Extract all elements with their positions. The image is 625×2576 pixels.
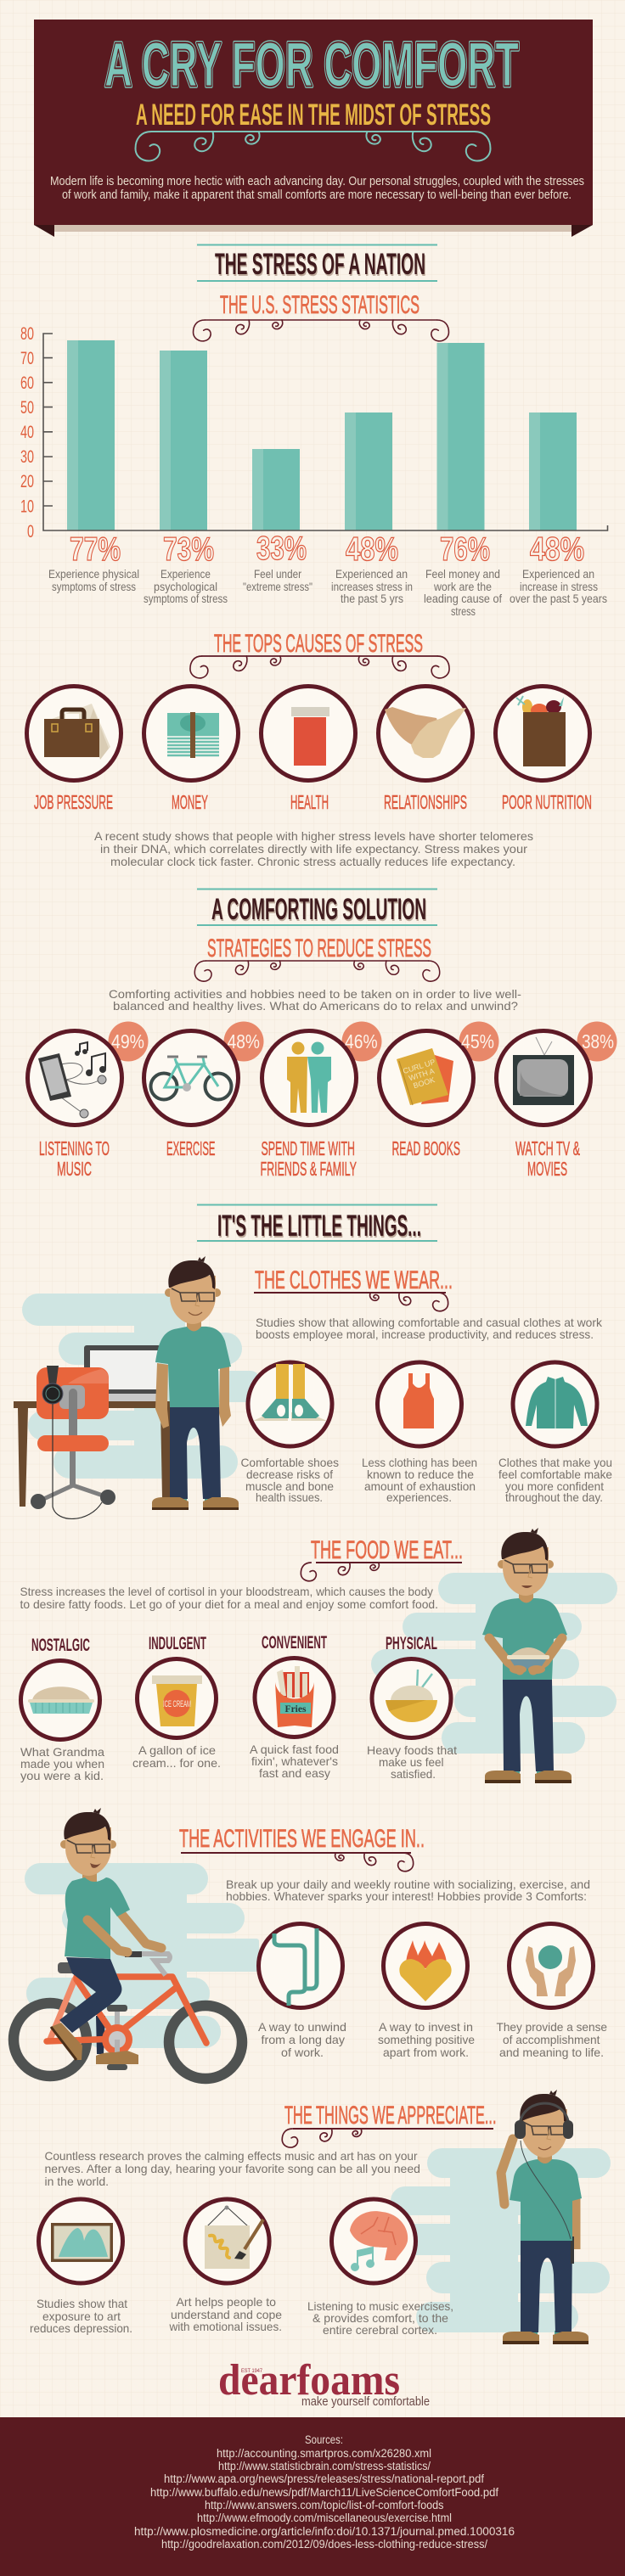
bar descriptions: the past 5 yrs — [341, 592, 403, 605]
food labels: PHYSICAL — [386, 1634, 437, 1653]
y axis labels: 30 — [20, 447, 34, 467]
sources list: http://www.statisticbrain.com/stress-statistics/ — [218, 2460, 431, 2472]
axes — [43, 334, 608, 530]
captions: appreciation: reduces depression. — [30, 2321, 132, 2335]
text: clothes intro: Studies show that allowing comfortable and casual clothes at work — [256, 1316, 603, 1329]
frame — [47, 1977, 206, 2043]
shoe — [51, 2023, 82, 2060]
captions: clothes: decrease risks of — [246, 1468, 333, 1481]
subheading: strategies to reduce stress: STRATEGIES TO REDUCE STRESS — [207, 934, 431, 962]
captions: clothes — [241, 1456, 612, 1504]
logo: dearfoams: make yourself comfortable — [301, 2395, 430, 2409]
icon: job pressure — [27, 686, 121, 781]
percentage labels: 48% — [530, 531, 584, 568]
strategy labels: MOVIES — [527, 1158, 567, 1180]
y axis labels — [20, 324, 34, 542]
strategy labels: EXERCISE — [166, 1137, 216, 1159]
icon: read books: CURL UP — [402, 1058, 436, 1075]
bar descriptions: increases stress in — [331, 580, 413, 593]
subheading: clothes we wear: THE CLOTHES WE WEAR... — [255, 1266, 453, 1294]
headphones on chair — [42, 1366, 102, 1518]
sources list: http://accounting.smartpros.com/x26280.xml — [217, 2447, 431, 2460]
captions: clothes: amount of exhaustion — [364, 1479, 476, 1493]
percentage labels: 33% — [256, 530, 307, 567]
bubble percentages: 45% — [461, 1030, 494, 1052]
icon: ice cream — [138, 1658, 216, 1738]
desk — [14, 1401, 170, 1507]
strategy labels: SPEND TIME WITH — [262, 1137, 355, 1159]
icon: exercise — [144, 1030, 238, 1125]
subheading: food we eat: THE FOOD WE EAT... — [311, 1536, 463, 1564]
text: telomere study: molecular clock tick faster. Chronic stress actually reduces life expectancy. — [110, 855, 515, 868]
bar descriptions: Experienced an — [335, 567, 408, 581]
y axis labels: 10 — [20, 497, 34, 516]
sources list: http://goodrelaxation.com/2012/09/does-less-clothing-reduce-stress/ — [161, 2538, 487, 2551]
captions: food — [20, 1743, 457, 1782]
subheading: activities we engage in — [179, 1825, 425, 1872]
logo: dearfoams: EST 1947 — [241, 2368, 262, 2374]
captions: activities — [258, 2020, 607, 2059]
heading: it's the little things: IT'S THE LITTLE THINGS... — [217, 1209, 421, 1243]
subheading: u.s. stress statistics: THE U.S. STRESS STATISTICS — [220, 291, 419, 319]
captions: clothes: muscle and bone — [245, 1479, 334, 1493]
bar descriptions: Feel under — [254, 567, 301, 581]
cause labels: HEALTH — [290, 791, 329, 813]
captions: appreciation: entire cerebral cortex. — [323, 2323, 437, 2337]
captions: activities: A way to unwind — [258, 2020, 346, 2034]
bar descriptions: symptoms of stress — [144, 592, 228, 605]
banner — [34, 20, 593, 237]
text: telomere study: A recent study shows that people with higher stress levels have shorter telomeres — [94, 829, 533, 843]
text: telomere study: in their DNA, which correlates directly with life expectancy. Stress makes your — [100, 842, 527, 856]
captions: clothes: throughout the day. — [505, 1490, 603, 1504]
icon: read books: WITH A — [408, 1067, 436, 1082]
icon: tank top — [377, 1362, 462, 1446]
captions: appreciation: Listening to music exercises, — [307, 2299, 453, 2313]
panel: sources footer — [0, 2417, 625, 2576]
bar descriptions: leading cause of — [424, 592, 502, 605]
bar descriptions: Experienced an — [522, 567, 594, 581]
crank — [102, 2005, 132, 2070]
icon: passion heart — [384, 1923, 467, 2008]
text: comforting activities: Comforting activities and hobbies need to be taken on in order to live well- — [109, 987, 521, 1001]
captions: activities: A way to invest in — [379, 2020, 473, 2034]
captions: food: satisfied. — [391, 1767, 436, 1781]
sources list: http://www.plosmedicine.org/article/info:doi/10.1371/journal.pmed.1000316 — [134, 2525, 515, 2538]
percentage labels — [70, 530, 584, 568]
person: food — [482, 1528, 572, 1783]
captions: activities: something positive — [378, 2033, 475, 2046]
subheading: clothes we wear — [254, 1266, 453, 1311]
text: activities intro: hobbies. Whatever sparks your interest! Hobbies provide 3 Comforts: — [226, 1889, 587, 1903]
bubble percentages — [111, 1030, 614, 1052]
captions: appreciation — [30, 2295, 453, 2337]
bar chart — [20, 324, 608, 618]
panel: activities clouds — [25, 1863, 259, 2048]
y axis labels: 60 — [20, 373, 34, 393]
arms and pie in hands — [489, 1638, 562, 1674]
text: food intro: Stress increases the level of cortisol in your bloodstream, which causes the body — [20, 1585, 433, 1598]
cause labels: RELATIONSHIPS — [384, 791, 467, 813]
bar descriptions: Experience — [160, 567, 211, 581]
text: appreciation intro — [44, 2149, 420, 2188]
captions: food: fast and easy — [259, 1766, 330, 1780]
icon: brain and music — [331, 2199, 416, 2283]
captions: food: make us feel — [379, 1755, 443, 1769]
captions: food: A quick fast food — [250, 1743, 339, 1756]
cause labels: MONEY — [172, 791, 208, 813]
panel: strategies — [27, 1022, 617, 1180]
subheading: top causes of stress: THE TOPS CAUSES OF STRESS — [214, 630, 423, 658]
wheels — [14, 2003, 242, 2079]
text: clothes intro: boosts employee moral, increase productivity, and reduces stress. — [256, 1327, 594, 1341]
captions: food: A gallon of ice — [138, 1743, 216, 1757]
y axis labels: 70 — [20, 349, 34, 368]
icon: friends and family — [262, 1030, 357, 1125]
bar descriptions: stress — [451, 604, 476, 618]
torso — [82, 1867, 97, 1883]
food labels — [31, 1633, 437, 1655]
strategy labels: READ BOOKS — [392, 1137, 460, 1159]
cause labels: JOB PRESSURE — [34, 791, 113, 813]
subheading: u.s. stress statistics — [194, 291, 448, 341]
icon: read books: BOOK — [412, 1075, 436, 1090]
y axis labels: 80 — [20, 324, 34, 344]
heading: the stress of a nation: THE STRESS OF A NATION — [215, 248, 425, 281]
y axis labels: 40 — [20, 423, 34, 442]
bubble percentages: 48% — [228, 1030, 260, 1052]
strategy labels — [39, 1137, 580, 1180]
icon: fries — [255, 1658, 334, 1737]
text: clothes intro — [256, 1316, 603, 1341]
bar descriptions: over the past 5 years — [510, 592, 607, 605]
headphones — [515, 2103, 573, 2239]
food labels: CONVENIENT — [262, 1633, 327, 1653]
laptop — [84, 1345, 160, 1401]
captions: clothes: Comfortable shoes — [241, 1456, 339, 1469]
icon: hands and globe — [510, 1923, 593, 2008]
icon: fries: Fries — [285, 1704, 307, 1715]
bar descriptions: increase in stress — [520, 580, 598, 593]
icon: framed art — [39, 2199, 122, 2283]
captions: food: made you when — [20, 1757, 104, 1771]
text: telomere study — [94, 829, 533, 868]
intro text — [50, 174, 584, 202]
logo: dearfoams: dearfoams — [218, 2356, 400, 2405]
y axis labels: 20 — [20, 472, 34, 491]
captions: appreciation: Studies show that — [37, 2297, 127, 2310]
captions: clothes: Less clothing has been — [362, 1456, 477, 1469]
panel: food clouds — [371, 1573, 617, 1754]
icon: read books — [379, 1030, 474, 1125]
icon: unwind — [258, 1923, 343, 2008]
sources list — [134, 2433, 515, 2551]
percentage bubbles — [109, 1022, 617, 1061]
bar descriptions — [48, 567, 607, 618]
captions: clothes: health issues. — [256, 1490, 323, 1504]
captions: food: cream... for one. — [132, 1756, 221, 1770]
bar descriptions: psychological — [154, 580, 217, 593]
far leg — [96, 2016, 105, 2054]
panel: causes of stress — [27, 686, 592, 813]
icon: jacket — [513, 1362, 597, 1446]
text: appreciation intro: in the world. — [44, 2175, 109, 2188]
captions: food: What Grandma — [20, 1745, 104, 1759]
icon: pie — [20, 1660, 100, 1740]
panel: clothes clouds — [22, 1294, 259, 1479]
subheading: top causes of stress — [190, 630, 449, 678]
icon: money — [144, 686, 238, 781]
captions: clothes: you more confident — [505, 1479, 604, 1493]
captions: clothes: Clothes that make you — [498, 1456, 612, 1469]
text: comforting activities: balanced and healthy lives. What do Americans do to relax and unwind? — [113, 999, 518, 1013]
bar descriptions: symptoms of stress — [52, 580, 136, 593]
icon: listening to music — [27, 1030, 122, 1125]
handlebar — [136, 1954, 170, 1975]
strategy labels: FRIENDS & FAMILY — [260, 1158, 357, 1180]
icon: watch tv and movies — [496, 1030, 591, 1125]
text: food intro: to desire fatty foods. Let go of your diet for a meal and enjoy some comfort food. — [20, 1597, 438, 1611]
strategy labels: MUSIC — [57, 1158, 92, 1180]
captions: activities: They provide a sense — [496, 2020, 607, 2034]
captions: activities: of work. — [281, 2046, 324, 2059]
captions: clothes: experiences. — [386, 1490, 452, 1504]
sources list: http://www.answers.com/topic/list-of-comfort-foods — [205, 2499, 444, 2511]
captions: food: Heavy foods that — [367, 1743, 457, 1757]
captions: activities: and meaning to life. — [499, 2046, 604, 2059]
captions: appreciation: understand and cope — [171, 2308, 282, 2321]
icon: painting — [185, 2199, 269, 2283]
sources list: http://www.buffalo.edu/news/pdf/March11/LiveScienceComfortFood.pdf — [150, 2486, 498, 2499]
percentage labels: 77% — [70, 531, 121, 568]
sources list: http://www.apa.org/news/press/releases/stress/national-report.pdf — [164, 2472, 484, 2485]
icon: relationships — [379, 686, 472, 781]
captions: activities: apart from work. — [383, 2046, 469, 2059]
cause labels — [34, 791, 592, 813]
leg — [59, 1957, 121, 2033]
captions: food: fixin', whatever's — [251, 1754, 338, 1768]
panel: appreciation clouds — [391, 2148, 611, 2332]
strategy labels: LISTENING TO — [39, 1137, 110, 1159]
desk with laptop and chair — [14, 1345, 170, 1518]
bubble percentages: 49% — [111, 1030, 144, 1052]
captions: activities: of accomplishment — [503, 2033, 600, 2046]
icon: bowl of rice — [372, 1658, 451, 1738]
sources list: http://www.efmoody.com/miscellaneous/exercise.html — [197, 2511, 452, 2524]
saddle — [58, 1962, 75, 1973]
icon: comfortable shoes — [248, 1362, 332, 1446]
bar descriptions: Feel money and — [425, 567, 500, 581]
captions: appreciation: & provides comfort, to the — [312, 2311, 448, 2325]
percentage labels: 73% — [163, 531, 214, 568]
sources list: Sources: — [305, 2433, 343, 2446]
bubble percentages: 38% — [582, 1030, 614, 1052]
bar descriptions: Experience physical — [48, 567, 139, 581]
text: food intro — [20, 1585, 438, 1611]
food labels: INDULGENT — [149, 1634, 206, 1653]
y axis labels: 50 — [20, 398, 34, 418]
bars — [67, 340, 577, 530]
percentage labels: 48% — [346, 531, 398, 568]
captions: food: you were a kid. — [20, 1769, 104, 1782]
subheading: activities we engage in: THE ACTIVITIES WE ENGAGE IN.. — [179, 1825, 425, 1853]
text: appreciation intro: Countless research proves the calming effects music and art has on your — [44, 2149, 418, 2163]
person: clothes — [152, 1256, 239, 1510]
captions: activities: from a long day — [262, 2033, 345, 2046]
percentage labels: 76% — [440, 531, 490, 568]
y axis labels: 0 — [27, 522, 34, 542]
text: activities intro — [226, 1877, 590, 1903]
subheading: things we appreciate — [282, 2102, 496, 2147]
captions: appreciation: Art helps people to — [177, 2295, 276, 2309]
near shoe — [96, 2051, 138, 2064]
text: activities intro: Break up your daily and weekly routine with socializing, exercise, and — [226, 1877, 590, 1891]
captions: clothes: known to reduce the — [367, 1468, 474, 1481]
heading: a comforting solution: A COMFORTING SOLUTION — [211, 893, 426, 926]
icon: health — [262, 686, 355, 781]
flourish — [136, 132, 491, 161]
food labels: NOSTALGIC — [31, 1636, 90, 1655]
captions: appreciation: exposure to art — [42, 2309, 121, 2323]
text: appreciation intro: nerves. After a long day, hearing your favorite song can be all you need — [44, 2162, 420, 2175]
subheading: strategies to reduce stress — [194, 934, 440, 981]
person: headphones — [501, 2090, 588, 2344]
icon: poor nutrition — [496, 686, 589, 781]
icon: ice cream: ICE CREAM — [163, 1699, 191, 1709]
bar descriptions: "extreme stress" — [243, 580, 312, 593]
subheading: food we eat — [301, 1536, 463, 1581]
text: comforting activities — [109, 987, 521, 1013]
person on bicycle — [14, 1808, 242, 2079]
captions: appreciation: with emotional issues. — [169, 2320, 282, 2333]
bar descriptions: work are the — [433, 580, 492, 593]
chair — [31, 1367, 115, 1509]
captions: clothes: feel comfortable make — [498, 1468, 612, 1481]
bubble percentages: 46% — [345, 1030, 378, 1052]
